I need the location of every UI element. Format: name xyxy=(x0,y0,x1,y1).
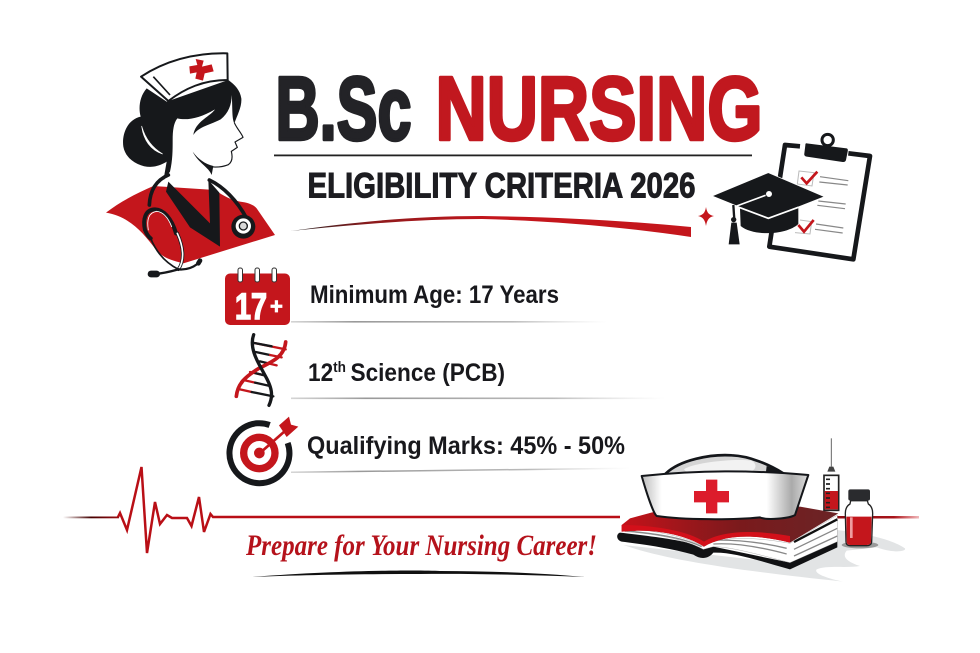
label: science: Science (PCB) xyxy=(350,359,505,387)
stethoscope tubes xyxy=(144,175,247,274)
clipboard clip xyxy=(804,134,848,162)
medicine vial xyxy=(842,489,878,548)
criterion: minimum age xyxy=(225,268,607,327)
icon: DNA helix xyxy=(236,335,286,405)
title rule xyxy=(274,154,752,156)
icon: target with arrow xyxy=(229,417,298,483)
title part: NURSING: NURSING xyxy=(436,60,762,160)
icon: calendar 17+ xyxy=(225,268,290,327)
tagline swoosh xyxy=(253,571,585,577)
checklist xyxy=(795,171,848,234)
nurse hair xyxy=(123,80,241,181)
sparkle xyxy=(698,207,714,226)
graduation cap xyxy=(712,173,824,244)
label: science: 12 xyxy=(308,359,333,387)
shadow xyxy=(623,530,905,582)
underline xyxy=(291,468,630,473)
underline xyxy=(291,398,665,399)
icon: calendar 17+: + xyxy=(270,294,283,319)
icon: calendar 17+: 17 xyxy=(235,286,267,327)
head and hair xyxy=(123,80,243,181)
jaw shadow xyxy=(193,152,213,175)
nurse uniform xyxy=(106,186,275,263)
uniform collar xyxy=(166,180,220,247)
red swoosh xyxy=(291,216,691,237)
pulse fade-in xyxy=(63,516,119,518)
underline xyxy=(291,321,607,323)
label: science: th xyxy=(333,359,346,376)
pulse spikes xyxy=(118,467,620,553)
stethoscope chest piece xyxy=(231,215,255,239)
title part: B.Sc: B.Sc xyxy=(276,60,412,160)
title: B.Sc NURSING xyxy=(276,60,762,160)
clipboard xyxy=(769,134,870,259)
book xyxy=(617,507,838,569)
label: qualifying marks: Qualifying Marks: 45% - 50% xyxy=(307,432,625,460)
criterion: science xyxy=(236,335,665,405)
face profile xyxy=(210,123,243,167)
book, cap, syringe and vial illustration xyxy=(617,438,905,582)
syringe xyxy=(824,438,839,510)
cap stripe xyxy=(153,77,170,95)
heartbeat line xyxy=(63,467,919,553)
subtitle: ELIGIBILITY CRITERIA 2026 xyxy=(308,166,696,206)
nurse illustration xyxy=(106,53,275,274)
tagline: Prepare for Your Nursing Career! xyxy=(245,529,597,562)
cap cross xyxy=(189,59,214,81)
clipboard and graduation cap xyxy=(712,134,870,259)
nurse cap on book xyxy=(642,455,808,519)
pulse right segment xyxy=(835,516,919,518)
criterion: qualifying marks xyxy=(229,417,630,483)
bun highlight xyxy=(142,126,163,154)
label: minimum age: Minimum Age: 17 Years xyxy=(310,281,559,309)
uniform and stethoscope xyxy=(106,175,275,274)
nurse cap xyxy=(141,53,228,101)
